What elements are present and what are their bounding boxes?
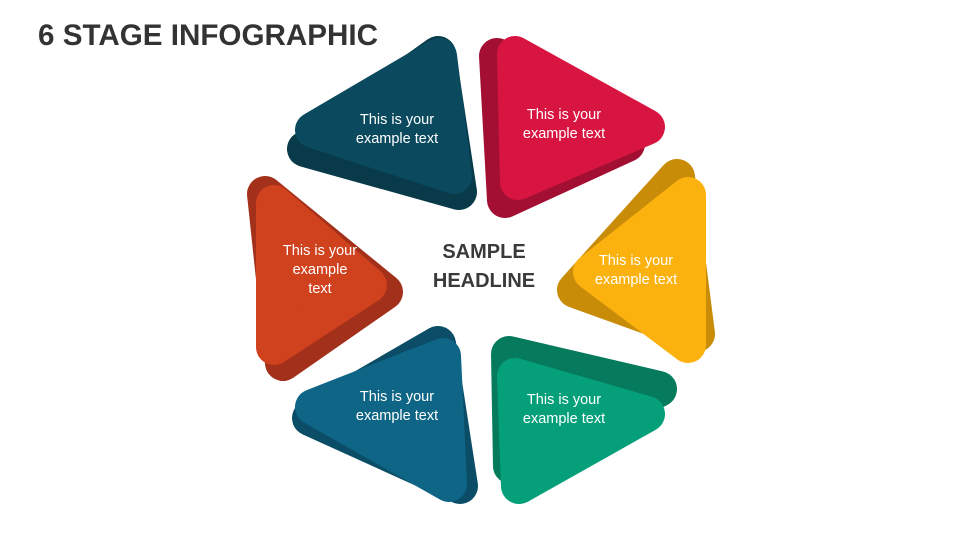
text: right: example text	[595, 272, 677, 288]
text: top-left: example text	[356, 131, 438, 147]
text: top-left: This is your	[360, 112, 434, 128]
text: top-right: This is your	[527, 107, 601, 123]
panel: bottom-right green	[509, 354, 659, 486]
panel: right yellow	[575, 177, 697, 345]
panel: top-right crimson	[497, 54, 647, 200]
panel: bottom-left blue	[310, 344, 460, 486]
text: left: text	[308, 281, 332, 297]
text: bottom-right: This is your	[527, 392, 601, 408]
panel: left orange	[265, 194, 385, 363]
text: left: This is your	[283, 243, 357, 259]
text: top-right: example text	[523, 126, 605, 142]
center headline: SAMPLE	[442, 241, 526, 263]
text: bottom-right: example text	[523, 411, 605, 427]
center headline: HEADLINE	[433, 270, 535, 292]
panel: top-left teal	[305, 54, 459, 192]
text: left: example	[293, 262, 347, 278]
text: right: This is your	[599, 253, 673, 269]
title: 6 STAGE INFOGRAPHIC	[38, 19, 378, 52]
text: bottom-left: example text	[356, 408, 438, 424]
text: bottom-left: This is your	[360, 389, 434, 405]
